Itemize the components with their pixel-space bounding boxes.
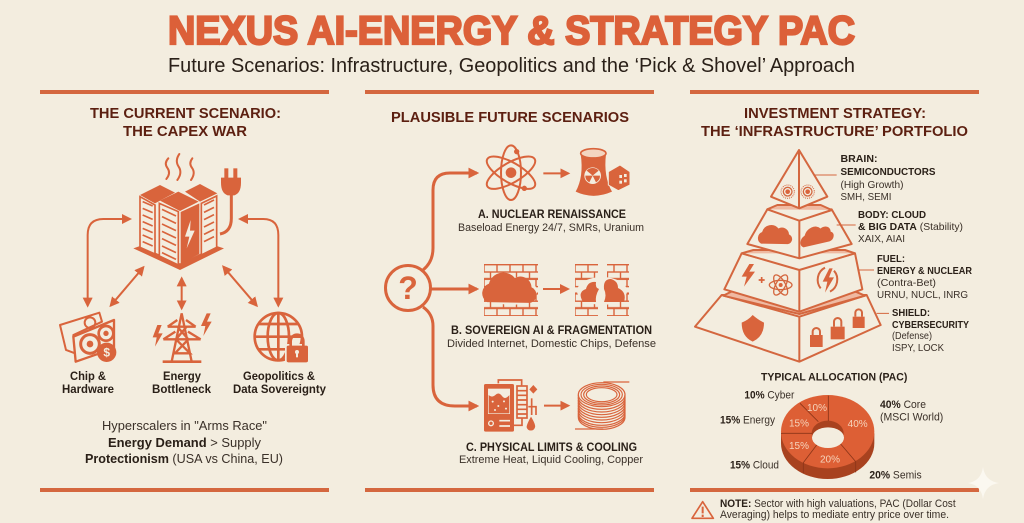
icon: data center (133, 154, 224, 270)
donut chart: 10% (807, 403, 827, 414)
label: chip and hardware: Chip & (70, 371, 106, 383)
scenario A text: A. NUCLEAR RENAISSANCE (478, 209, 626, 221)
arrow (543, 288, 568, 290)
label: fuel energy and nuclear (877, 253, 972, 301)
label: chip and hardware (62, 371, 114, 396)
pyramid level: brain (771, 150, 827, 208)
arrow (544, 403, 568, 409)
chart title: TYPICAL ALLOCATION (PAC) (761, 372, 908, 384)
title: NEXUS AI-ENERGY & STRATEGY PAC (168, 9, 855, 53)
label: shield cybersecurity (892, 307, 969, 354)
pyramid level: shield (695, 291, 881, 362)
icon: power pylon (153, 313, 212, 362)
icon: globe with lock (255, 313, 309, 363)
icon: question mark branching: ? (398, 270, 418, 306)
text block: summary: Energy Demand > Supply (108, 435, 261, 450)
arrows (88, 219, 278, 308)
icon: question mark branching (386, 173, 477, 406)
panel: investment strategy (690, 90, 979, 521)
subtitle: Future Scenarios: Infrastructure, Geopolitics and the ‘Pick & Shovel’ Approach (168, 55, 855, 77)
note (720, 498, 956, 521)
relationship diagram (60, 154, 309, 363)
scenario A text: Baseload Energy 24/7, SMRs, Uranium (458, 222, 644, 234)
heading: infrastructure portfolio: THE ‘INFRASTRUCTURE’ PORTFOLIO (701, 124, 968, 140)
label: shield cybersecurity: (Defense) (892, 330, 932, 342)
heading: the capex war: THE CURRENT SCENARIO: (90, 106, 281, 122)
label: brain semiconductors: (High Growth) (840, 179, 904, 191)
chart labels: 10% Cyber (744, 390, 795, 402)
label: shield cybersecurity: CYBERSECURITY (892, 319, 969, 331)
heading: the capex war: THE CAPEX WAR (123, 124, 248, 140)
icon: firewall with cloud (482, 264, 538, 316)
label: brain semiconductors: SEMICONDUCTORS (840, 166, 936, 178)
chart labels (720, 390, 943, 481)
note: NOTE: Sector with high valuations, PAC (Dollar Cost (720, 498, 956, 510)
heading: infrastructure portfolio (701, 106, 968, 140)
label: geopolitics and data sovereignty: Data Sovereignty (233, 384, 327, 396)
label: energy bottleneck: Bottleneck (152, 384, 212, 396)
scenario B text (447, 325, 656, 350)
donut chart: 40% (848, 419, 868, 430)
heading: the capex war (90, 106, 281, 140)
label: chip and hardware: Hardware (62, 384, 114, 396)
scenario C text: Extreme Heat, Liquid Cooling, Copper (459, 454, 643, 466)
label: brain semiconductors (840, 153, 936, 203)
icon: sparkle (968, 467, 999, 499)
heading: plausible future scenarios: PLAUSIBLE FUTURE SCENARIOS (391, 110, 629, 126)
label: geopolitics and data sovereignty: Geopolitics & (243, 371, 315, 383)
text block: summary: Protectionism (USA vs China, EU) (85, 451, 283, 466)
icon: gpu chips (60, 313, 116, 362)
note: Averaging) helps to mediate entry price over time. (720, 509, 949, 521)
scenario B text: Divided Internet, Domestic Chips, Defense (447, 338, 656, 350)
icon: copper coil (575, 382, 629, 429)
pyramid (695, 150, 889, 362)
donut chart: 15% (789, 418, 809, 429)
icon: warning triangle (692, 502, 713, 518)
label: fuel energy and nuclear: URNU, NUCL, INRG (877, 289, 968, 301)
label: fuel energy and nuclear: FUEL: (877, 253, 905, 265)
arrow (543, 170, 568, 176)
panel: plausible future scenarios (365, 90, 656, 492)
chart labels: 20% Semis (869, 469, 922, 481)
label: geopolitics and data sovereignty (233, 371, 327, 396)
icon: broken firewall and cloud (575, 264, 629, 316)
pyramid level: fuel (724, 250, 862, 312)
chart labels: 40% Core (880, 399, 926, 411)
allocation chart (692, 372, 956, 521)
label: energy bottleneck (152, 371, 212, 396)
scenario C text: C. PHYSICAL LIMITS & COOLING (466, 442, 637, 454)
donut chart (781, 395, 874, 479)
label: shield cybersecurity: ISPY, LOCK (892, 342, 944, 354)
label: brain semiconductors: SMH, SEMI (840, 191, 892, 203)
label: energy bottleneck: Energy (163, 371, 202, 383)
text block: summary: Hyperscalers in "Arms Race" (102, 418, 267, 433)
chart labels: 15% Energy (720, 414, 775, 426)
text block: summary (85, 418, 283, 466)
icon: power plug (220, 168, 241, 234)
icon: cooling tower and cube (576, 149, 630, 196)
icon: liquid cooling unit (484, 380, 537, 432)
donut chart: 20% (820, 455, 840, 466)
label: body cloud and big data: & BIG DATA (Stability) (858, 221, 963, 233)
chart labels: 15% Cloud (730, 459, 779, 471)
icon: gpu chips: $ (103, 346, 110, 360)
scenario B text: B. SOVEREIGN AI & FRAGMENTATION (451, 325, 652, 337)
scenario C text (459, 442, 643, 466)
scenario A text (458, 209, 644, 234)
pyramid level: body (747, 205, 852, 258)
scenario C icons (484, 380, 629, 432)
donut chart: 15% (789, 441, 809, 452)
label: brain semiconductors: BRAIN: (840, 153, 878, 165)
label: body cloud and big data: BODY: CLOUD (858, 209, 926, 221)
panel: current scenario (40, 90, 329, 492)
label: body cloud and big data: XAIX, AIAI (858, 233, 905, 245)
label: fuel energy and nuclear: ENERGY & NUCLEAR (877, 265, 972, 277)
label: body cloud and big data (858, 209, 963, 245)
scenario A icons (482, 145, 630, 200)
icon: atom (482, 145, 540, 200)
label: fuel energy and nuclear: (Contra-Bet) (877, 277, 936, 289)
scenario B icons (482, 264, 629, 316)
heading: infrastructure portfolio: INVESTMENT STRATEGY: (744, 106, 926, 122)
label: shield cybersecurity: SHIELD: (892, 307, 930, 319)
chart labels: (MSCI World) (880, 411, 943, 423)
